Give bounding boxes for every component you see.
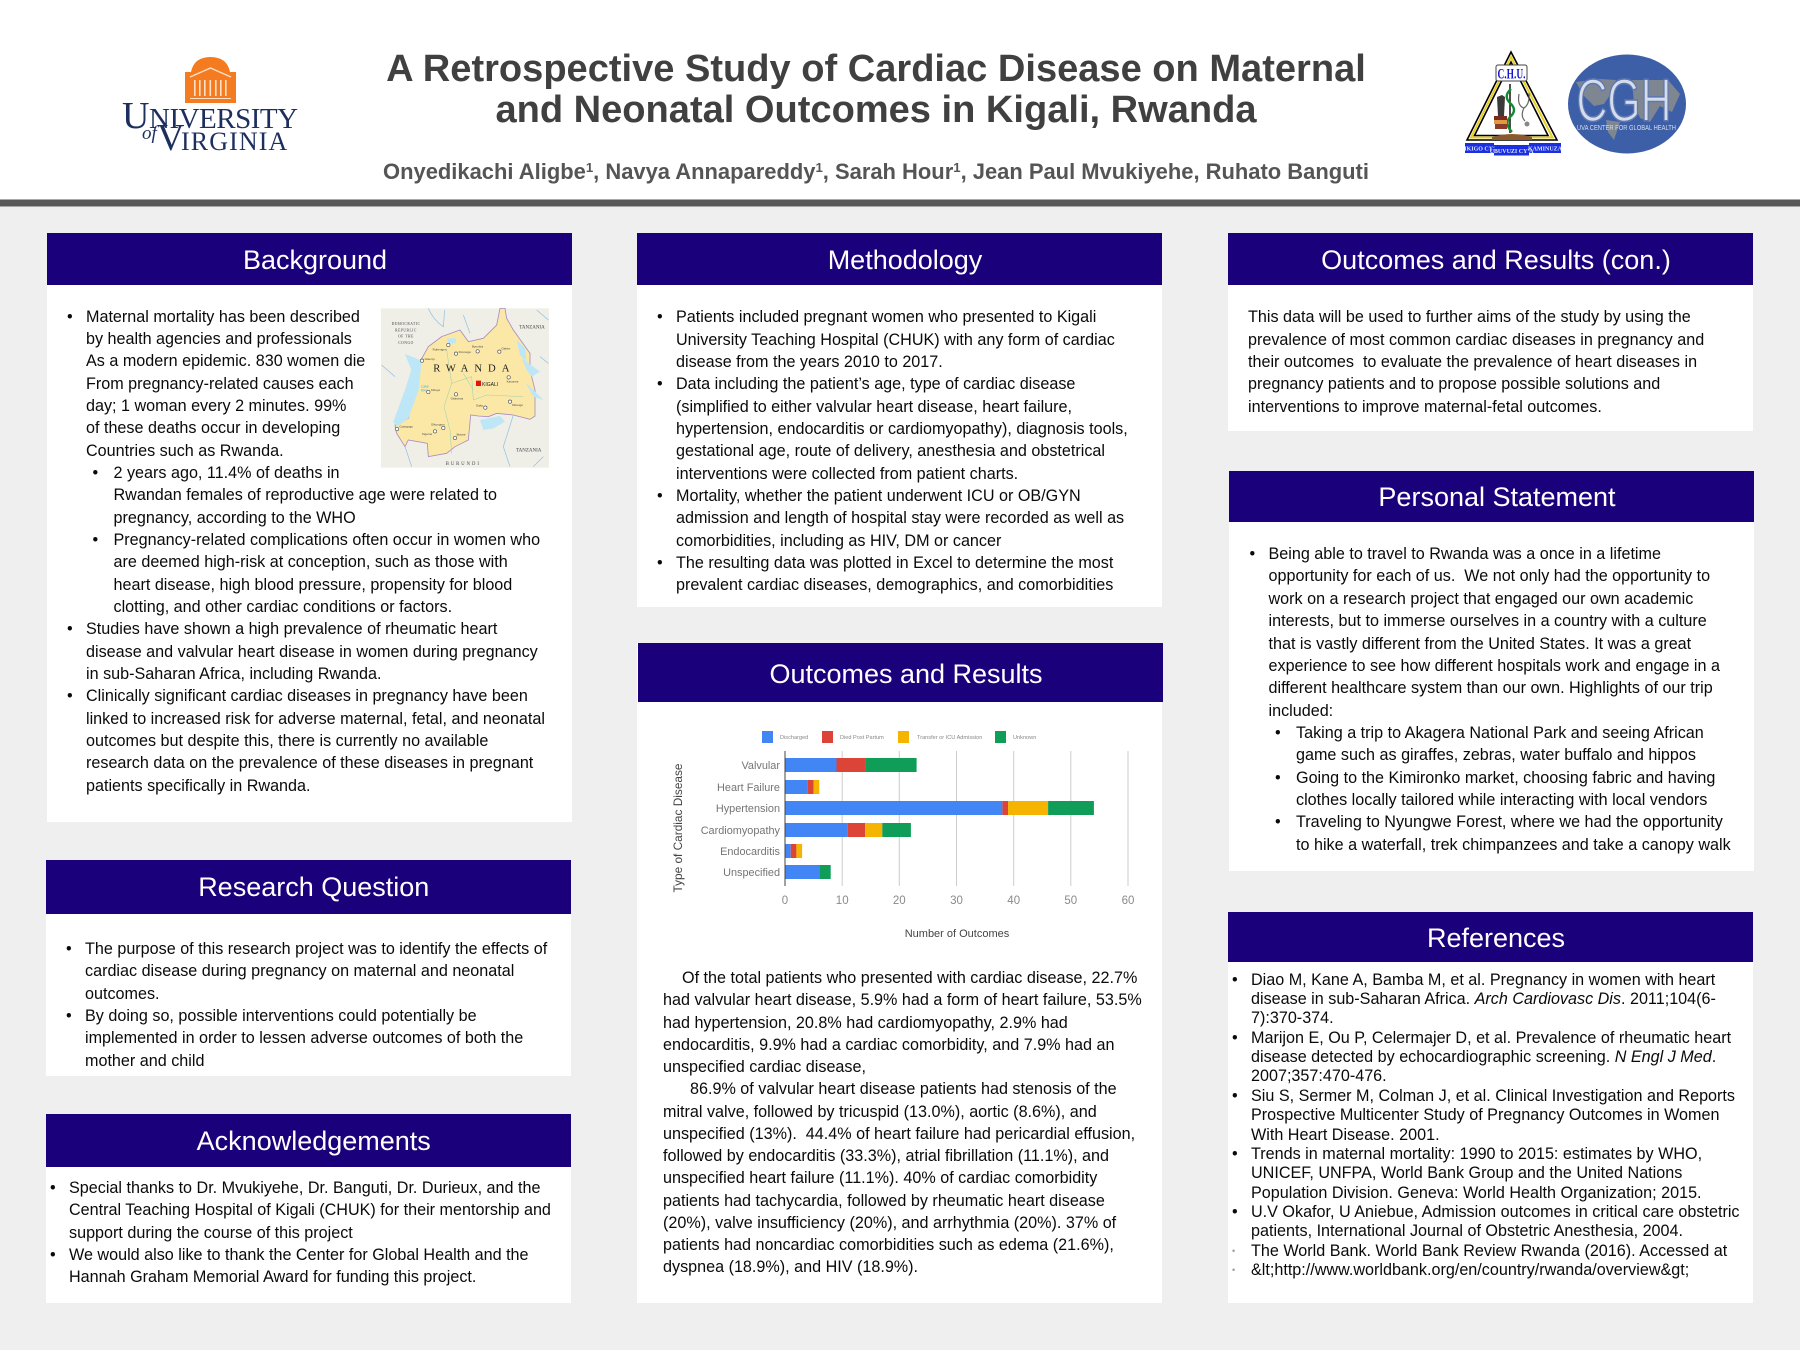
axis ticks: 60 [1122,895,1134,907]
map of Rwanda [381,308,549,468]
logo: UVA Center for Global Health [1568,54,1686,154]
text: research question: The purpose of this research project was to identify the effects of [85,940,547,958]
panel: research question [46,860,570,1076]
axis ticks: 10 [836,895,849,907]
text: outcomes continued [1248,308,1704,416]
logo: CHU: IKIGO CY' [1464,146,1495,152]
chart legend [762,731,1036,743]
text: outcomes summary: had hypertension, 20.8% had cardiomyopathy, 2.9% had [663,1014,1068,1032]
text: methodology: Patients included pregnant women who presented to Kigali [676,308,1096,326]
text: background: disease and valvular heart disease in women during pregnancy [86,643,538,661]
map of Rwanda: Lake [421,384,429,388]
logo: University of Virginia: NIVERSITY [149,103,298,135]
text: personal statement: • [1275,769,1281,787]
title [386,48,1366,131]
text: background: Rwandan females of reproductive age were related to [114,486,497,504]
text: outcomes summary: mitral valve, followed by tricuspid (13.0%), aortic (8.6%), and [663,1103,1097,1121]
text: references [1232,970,1740,1279]
panel: background: • [67,687,73,705]
map of Rwanda: Kirunuga [459,350,471,354]
text: research question: mother and child [85,1052,204,1070]
panel: background: • [67,620,73,638]
logo: University of Virginia: IRGINIA [181,127,288,156]
text: references: Siu S, Sermer M, Colman J, et al. Clinical Investigation and Reports [1251,1087,1735,1105]
panel: references: • [1232,970,1238,988]
heading: outcomes and results [638,643,1163,702]
text: personal statement: • [1275,724,1281,742]
text: acknowledgements: We would also like to thank the Center for Global Health and the [69,1246,529,1264]
text: personal statement: interests, but to immerse ourselves in a country with a culture [1268,612,1707,630]
axis ticks: 0 [782,895,788,907]
panel: references: • [1232,1265,1235,1275]
text: background: Maternal mortality has been described [86,308,360,326]
heading: acknowledgements: Acknowledgements [197,1126,431,1156]
text: acknowledgements: Special thanks to Dr. Mvukiyehe, Dr. Banguti, Dr. Durieux, and the [69,1179,540,1197]
heading: background: Background [243,245,387,275]
text: personal statement [1250,545,1731,854]
stacked bar chart [671,731,1134,940]
panel: acknowledgements [46,1114,570,1303]
text: research question: cardiac disease during pregnancy on maternal and neonatal [85,962,514,980]
text: personal statement: Taking a trip to Akagera National Park and seeing African [1296,724,1704,742]
heading: research question: Research Question [198,872,429,902]
title: and Neonatal Outcomes in Kigali, Rwanda [495,89,1257,131]
heading: outcomes continued [1228,233,1753,285]
text: methodology: gestational age, route of delivery, anesthesia and obstetrical [676,442,1105,460]
title: A Retrospective Study of Cardiac Disease on Maternal [386,48,1366,90]
map of Rwanda: DEMOCRATIC [392,322,420,326]
text: references: U.V Okafor, U Aniebue, Admission outcomes in critical care obstetric [1251,1203,1740,1221]
panel: methodology: • [657,308,663,326]
heading: personal statement [1229,471,1754,522]
map of Rwanda: Gikongoro [431,422,445,426]
heading: references: References [1427,923,1565,953]
text: personal statement: to hike a waterfall, trek chimpanzees and take a canopy walk [1296,836,1731,854]
category labels: Cardiomyopathy [701,825,781,837]
text: personal statement: that is vastly different from the United States. It was a great [1268,635,1691,653]
text: background: day; 1 woman every 2 minutes. 99% [86,397,346,415]
text: methodology: hypertension, endocarditis or cardiomyopathy), diagnosis tools, [676,420,1128,438]
text: outcomes summary: dyspnea (18.9%), and HIV (18.9%). [663,1258,918,1276]
text: references: Trends in maternal mortality: 1990 to 2015: estimates by WHO, [1251,1145,1702,1163]
text: acknowledgements: support during the course of this project [69,1224,353,1242]
text: background: From pregnancy-related causes each [86,375,354,393]
map of Rwanda: RWANDA [433,364,515,375]
panel: personal statement [1229,471,1754,871]
map of Rwanda: KIGALI [482,382,498,388]
heading: personal statement: Personal Statement [1378,482,1616,512]
bars [785,758,1094,879]
panel: methodology: • [657,375,663,393]
text: research question: outcomes. [85,985,160,1003]
text: background: heart disease, high blood pressure, propensity for blood [114,576,512,594]
text: references: UNICEF, UNFPA, World Bank Group and the United Nations [1251,1164,1682,1182]
text: outcomes continued: prevalence of most common cardiac diseases in pregnancy and [1248,331,1704,349]
panel: methodology [637,233,1162,607]
text: references: 7):370-374. [1251,1009,1334,1027]
text: background: by health agencies and professionals [86,330,352,348]
heading: background [47,233,572,285]
text: background: Studies have shown a high prevalence of rheumatic heart [86,620,497,638]
text: methodology: University Teaching Hospital (CHUK) with any form of cardiac [676,331,1115,349]
heading: methodology [637,233,1162,285]
map of Rwanda: Byumba [472,345,483,349]
text: outcomes summary: had valvular heart disease, 5.9% had a form of heart failure, 53.5% [663,991,1142,1009]
logo: University of Virginia [122,57,298,158]
text: personal statement: included: [1268,702,1333,720]
text: outcomes summary: followed by endocarditis (33.3%), atrial fibrillation (11.1%), and [663,1147,1109,1165]
panel: methodology: • [657,554,663,572]
text: outcomes summary: unspecified (13%). 44.4% of heart failure had pericardial effusion, [663,1125,1135,1143]
map of Rwanda: Gisenyi [425,357,435,361]
logo: CHU: KAMINUZA [1528,146,1563,152]
text: background: are deemed high-risk at conception, such as those with [114,553,508,571]
axis ticks: 20 [893,895,906,907]
text: personal statement: experience to see how different hospitals work and engage in a [1268,657,1720,675]
map of Rwanda: TANZANIA [519,325,545,330]
text: background [67,308,545,795]
category labels [701,760,781,879]
map of Rwanda: Gabiro [501,347,511,351]
text: background: of these deaths occur in developing [86,419,340,437]
panel: methodology: • [657,487,663,505]
text: acknowledgements [50,1179,551,1286]
text: references: disease in sub-Saharan Africa. Arch Cardiovasc Dis. 2011;104(6- [1251,990,1716,1008]
text: outcomes summary: unspecified cardiac disease, [663,1058,866,1076]
text: methodology: comorbidities, including as HIV, DM or cancer [676,532,1001,550]
category labels: Valvular [741,760,780,772]
axis ticks: 50 [1064,895,1077,907]
text: background: • [92,531,98,549]
text: methodology: Data including the patient’s age, type of cardiac disease [676,375,1075,393]
text: methodology: The resulting data was plotted in Excel to determine the most [676,554,1113,572]
text: outcomes continued: their outcomes to evaluate the prevalence of heart diseases in [1248,353,1697,371]
map of Rwanda: Cyangugu [399,424,413,428]
map of Rwanda: Kibungo [512,403,523,407]
header divider [0,199,1800,207]
chart legend: Transfer or ICU Admission [917,735,982,741]
text: research question: By doing so, possible interventions could potentially be [85,1007,477,1025]
heading: outcomes continued: Outcomes and Results (con.) [1321,245,1671,275]
text: methodology [657,308,1128,594]
text: background: research data on the prevalence of these diseases in pregnant [86,754,533,772]
text: personal statement: Traveling to Nyungwe Forest, where we had the opportunity [1296,813,1723,831]
text: personal statement: different healthcare system than our own. Highlights of our trip [1268,679,1713,697]
logo: CHU [1464,50,1563,156]
text: methodology: prevalent cardiac diseases, demographics, and comorbidities [676,576,1113,594]
map of Rwanda: Gitarama [451,396,463,400]
panel: acknowledgements: • [50,1246,56,1264]
text: outcomes continued: pregnancy patients and to propose possible solutions and [1248,375,1660,393]
panel: references: • [1232,1145,1238,1163]
text: outcomes continued: interventions to improve maternal-fetal outcomes. [1248,398,1602,416]
text: personal statement: clothes locally tailored while interacting with local vendors [1296,791,1707,809]
category labels: Hypertension [716,803,780,815]
text: outcomes summary: endocarditis, 9.9% had a cardiac comorbidity, and 7.9% had an [663,1036,1114,1054]
panel: research question: • [66,940,72,958]
axis ticks: 40 [1007,895,1020,907]
text: research question: implemented in order to lessen adverse outcomes of both the [85,1029,523,1047]
logo: University of Virginia: U [122,95,149,137]
text: background: linked to increased risk for adverse maternal, fetal, and neonatal [86,710,545,728]
category labels: Unspecified [723,867,780,879]
map of Rwanda: BURUNDI [446,462,481,467]
text: outcomes continued: This data will be used to further aims of the study by using the [1248,308,1691,326]
text: references: disease detected by echocardiographic screening. N Engl J Med. [1251,1048,1716,1066]
header band [0,0,1800,207]
map of Rwanda: CONGO [398,341,414,345]
text: personal statement: • [1275,813,1281,831]
text: methodology: Mortality, whether the patient underwent ICU or OB/GYN [676,487,1081,505]
text: outcomes summary: patients had tachycardia, followed by rheumatic heart disease [663,1192,1105,1210]
panel: acknowledgements: • [50,1179,56,1197]
chart legend: Discharged [780,735,808,741]
authors: Onyedikachi Aligbe1, Navya Annapareddy1, Sarah Hour1, Jean Paul Mvukiyehe, Ruhato Banguti [383,159,1369,184]
text: references: Diao M, Kane A, Bamba M, et al. Pregnancy in women with heart [1251,970,1715,988]
logo: CHU: UBUVUZI CY'A [1490,149,1534,155]
map of Rwanda: Gako [476,404,484,408]
text: personal statement: opportunity for each of us. We not only had the opportunity to [1268,567,1710,585]
text: outcomes summary: patients had noncardiac comorbidities such as edema (21.6%), [663,1236,1114,1254]
text: background: in sub-Saharan Africa, including Rwanda. [86,665,381,683]
heading: methodology: Methodology [828,245,982,275]
text: background: pregnancy, according to the WHO [114,509,356,527]
heading: references [1228,912,1753,962]
map of Rwanda: OF THE [398,335,414,339]
text: personal statement: game such as giraffes, zebras, water buffalo and hippos [1296,746,1696,764]
x axis title: Number of Outcomes [905,928,1010,940]
category labels: Endocarditis [720,846,781,858]
text: methodology: (simplified to either valvular heart disease, heart failure, [676,398,1072,416]
category labels: Heart Failure [717,782,780,794]
text: methodology: disease from the years 2010 to 2017. [676,353,943,371]
map of Rwanda: TANZANIA [516,448,542,453]
text: references: &lt;http://www.worldbank.org/en/country/rwanda/overview&gt; [1251,1261,1689,1279]
text: outcomes summary: 86.9% of valvular heart disease patients had stenosis of the [690,1080,1117,1098]
axis ticks [782,895,1134,907]
heading: outcomes and results: Outcomes and Results [769,659,1043,689]
text: outcomes summary: (20%), valve insufficiency (20%), and arrhythmia (20%). 37% of [663,1214,1116,1232]
chart legend: Unknown [1013,735,1036,741]
panel: outcomes and results continued [1228,233,1753,431]
panel: references: • [1232,1203,1238,1221]
text: acknowledgements: Central Teaching Hospital of Kigali (CHUK) for their mentorship and [69,1201,551,1219]
text: background: Pregnancy-related complications often occur in women who [114,531,540,549]
text: background: Clinically significant cardiac diseases in pregnancy have been [86,687,528,705]
panel: references: • [1232,1087,1238,1105]
text: personal statement: Being able to travel to Rwanda was a once in a lifetime [1268,545,1661,563]
map of Rwanda: Kibuye [431,388,441,392]
panel: references [1228,912,1753,1303]
map of Rwanda: Ruhengeri [433,347,447,351]
text: references: Prospective Multicenter Study of Pregnancy Outcomes in Women [1251,1106,1719,1124]
text: acknowledgements: Hannah Graham Memorial Award for funding this project. [69,1268,476,1286]
panel: outcomes and results [637,643,1162,1303]
logo: University of Virginia: V [157,117,185,158]
text: background: patients specifically in Rwanda. [86,777,311,795]
map of Rwanda: Kigeme [422,432,433,436]
text: background: clotting, and other cardiac conditions or factors. [114,598,452,616]
text: references: With Heart Disease. 2001. [1251,1126,1440,1144]
text: background: Countries such as Rwanda. [86,442,284,460]
logo: CHU: C.H.U. [1498,66,1526,82]
panel: background [47,233,572,822]
heading: acknowledgements [46,1114,570,1167]
text: references: Population Division. Geneva: World Health Organization; 2015. [1251,1184,1702,1202]
text: references: The World Bank. World Bank Review Rwanda (2016). Accessed at [1251,1242,1727,1260]
text: references: Marijon E, Ou P, Celermajer D, et al. Prevalence of rheumatic heart [1251,1029,1731,1047]
text: outcomes summary: unspecified heart failure (11.1%). 40% of cardiac comorbidity [663,1169,1097,1187]
text: methodology: admission and length of hospital stay were recorded as well as [676,509,1124,527]
panel: references: • [1232,1029,1238,1047]
map of Rwanda: REPUBLIC [395,328,417,332]
map of Rwanda: Kivu [421,388,428,392]
text: references: patients, International Journal of Obstetric Anesthesia, 2004. [1251,1222,1683,1240]
text: background: outcomes but despite this, there is currently no available [86,732,488,750]
text: background: 2 years ago, 11.4% of deaths in [114,464,340,482]
map of Rwanda: Kayonza [507,380,519,384]
text: personal statement: work on a research project that engaged our own academic [1268,590,1693,608]
chart legend: Died Post Partum [840,735,884,741]
panel: research question: • [66,1007,72,1025]
text: research question [66,940,548,1070]
text: references: 2007;357:470-476. [1251,1067,1387,1085]
panel: personal statement: • [1250,545,1255,563]
text: background: • [92,464,98,482]
text: methodology: interventions were collected from patient charts. [676,465,1018,483]
y axis title: Type of Cardiac Disease [671,763,685,893]
heading: research question [46,860,570,914]
axis ticks: 30 [950,895,963,907]
panel: background: • [67,308,73,326]
panel: references: • [1232,1246,1235,1256]
text: outcomes summary [663,969,1142,1276]
map of Rwanda: Butare [457,433,466,437]
text: background: As a modern epidemic. 830 women die [86,352,365,370]
logo: University of Virginia: of [142,123,160,144]
text: personal statement: Going to the Kimironko market, choosing fabric and having [1296,769,1715,787]
text: outcomes summary: Of the total patients who presented with cardiac disease, 22.7% [682,969,1137,987]
